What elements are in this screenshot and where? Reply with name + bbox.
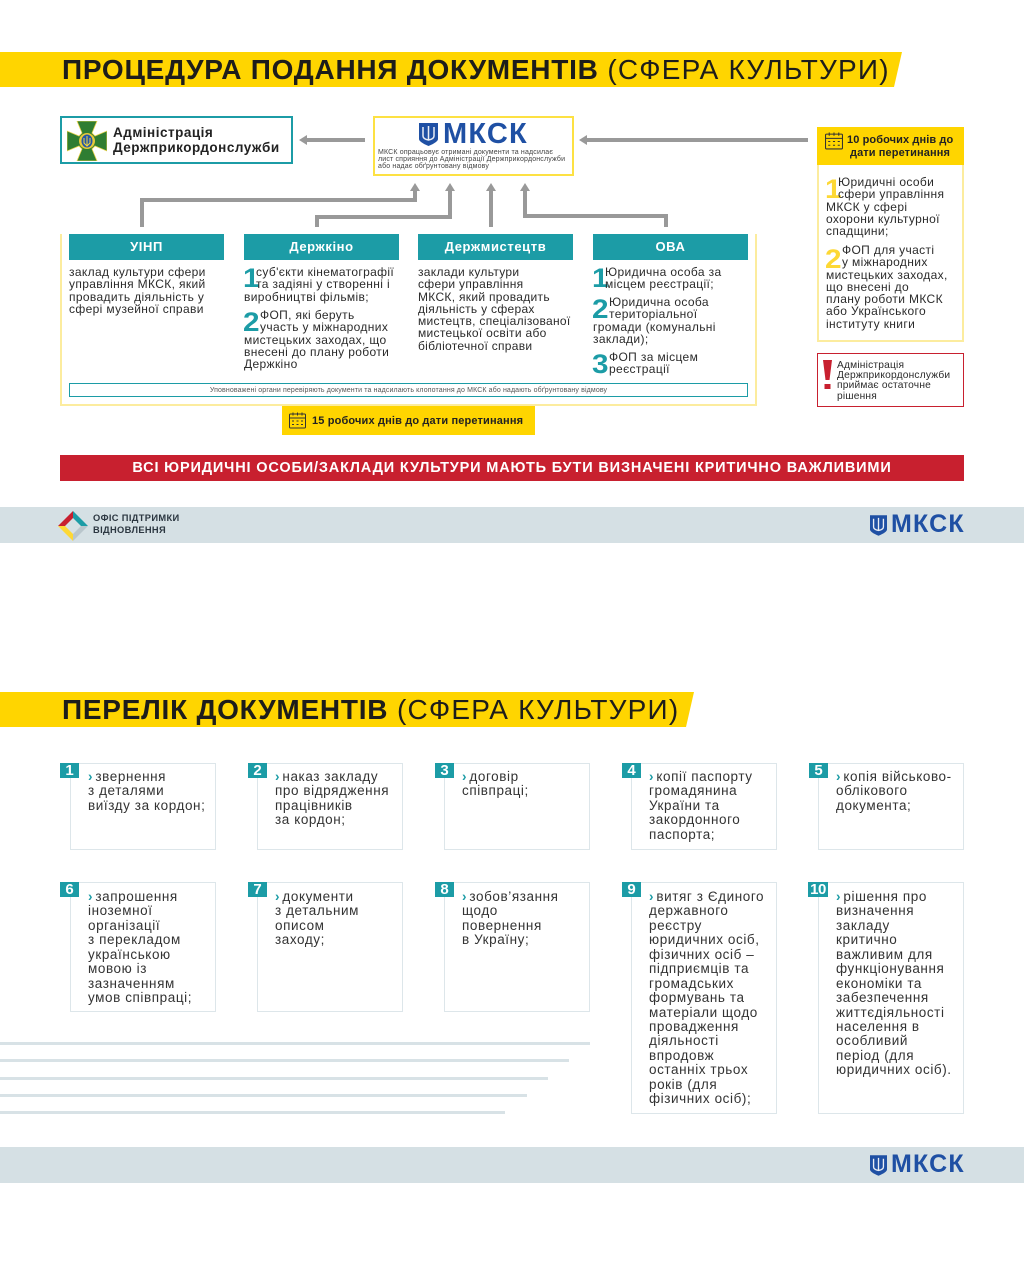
text: OVA item 2: заклади); [593, 332, 649, 346]
text: right item 2: інституту книги [826, 317, 915, 331]
footer bar 2 [0, 1147, 1024, 1183]
text: MKSK description: лист сприяння до Адміністрації Держприкордонслужби [378, 156, 565, 163]
frame: authorised bodies [60, 234, 757, 406]
title: list of documents: ПЕРЕЛІК ДОКУМЕНТІВ (СФЕРА КУЛЬТУРИ) [62, 694, 679, 725]
text: UINP: провадить діяльність у [69, 290, 204, 304]
card 1 [70, 763, 216, 850]
arrows: flow connectors [140, 135, 808, 227]
header: OVA [593, 234, 748, 260]
number: Derzhkino 2: 2 [243, 307, 260, 337]
tag 8 [435, 882, 454, 897]
text: Derzhkino item 2: внесені до плану роботи [244, 345, 389, 359]
text: Derzhkino item 2: мистецьких заходах, що [244, 333, 387, 347]
note: authorised bodies check documents: Уповноважені органи перевіряють документи та надсилають клопотання до МКСК або надають обґрунтовану відмову [210, 387, 607, 394]
text 2: про відрядження [275, 783, 389, 798]
text: right item 2 [826, 243, 948, 331]
text: OVA item 1: місцем реєстрації; [605, 277, 714, 291]
text 9: реєстру [649, 918, 702, 933]
text 2: › наказ закладу [275, 769, 378, 784]
text 6: з перекладом [88, 932, 181, 947]
card 5 [818, 763, 964, 850]
text 4: громадянина [649, 783, 737, 798]
tag 5 [809, 763, 828, 778]
icon: border guard cross [67, 121, 107, 161]
note: authorised bodies check documents [69, 383, 748, 397]
text 10: забезпечення [836, 990, 929, 1005]
text: Derzhmystetstv: заклади культури [418, 265, 519, 279]
text 7: › документи [275, 889, 354, 904]
text 4: закордонного [649, 812, 740, 827]
text 10: критично [836, 932, 897, 947]
number: right 2: 2 [825, 244, 842, 274]
text 2 [275, 769, 389, 827]
text 8: щодо [462, 903, 498, 918]
text 5: облікового [836, 783, 908, 798]
text 10: населення в [836, 1019, 920, 1034]
text: OVA item 3: реєстрації [609, 362, 670, 376]
text 3: › договір [462, 769, 519, 784]
text 5 [836, 769, 952, 813]
card 9 [631, 882, 777, 1114]
tag 1: 1 [65, 762, 74, 779]
footer bar 1 [0, 507, 1024, 543]
text 3 [462, 769, 529, 798]
text: final decision: рішення [837, 391, 877, 402]
text: MKSK description: МКСК опрацьовує отримані документи та надсилає [378, 149, 553, 156]
text 4: паспорта; [649, 827, 715, 842]
tag 10: 10 [810, 881, 826, 898]
text 10: функціонування [836, 961, 944, 976]
number: Derzhkino 1: 1 [243, 263, 260, 293]
text 6: › запрошення [88, 889, 178, 904]
text: right item 2: ФОП для участі [842, 243, 934, 257]
header: Derzhmystetstv: Держмистецтв [445, 239, 546, 254]
header: Derzhkino [244, 234, 399, 260]
number: right 1: 1 [825, 174, 842, 204]
text 9: › витяг з Єдиного [649, 889, 764, 904]
text 1: з деталями [88, 783, 164, 798]
text 1: › звернення [88, 769, 166, 784]
text 6: українською [88, 947, 171, 962]
tag 8: 8 [440, 881, 449, 898]
text: Derzhkino item 2: участь у міжнародних [260, 320, 388, 334]
tag 2: 2 [253, 762, 262, 779]
text: right item 2: або Українського [826, 304, 926, 318]
text: UINP: заклад культури сфери [69, 265, 206, 279]
text: Derzhmystetstv: діяльність у сферах [418, 302, 535, 316]
text 6: організації [88, 918, 160, 933]
text 4 [649, 769, 753, 842]
text 7: з детальним [275, 903, 359, 918]
text: Derzhkino item 1: виробництві фільмів; [244, 290, 369, 304]
text 6: умов співпраці; [88, 990, 192, 1005]
text: 10 days heading: дати перетинання [850, 147, 950, 159]
text: recovery office: ОФІС ПІДТРИМКИ [93, 513, 180, 523]
text 9: останніх трьох [649, 1062, 748, 1077]
text: OVA item 3 [609, 350, 698, 376]
icon: calendar small [825, 132, 843, 150]
tag 1 [60, 763, 79, 778]
tag 6 [60, 882, 79, 897]
panel: border guard administration [60, 116, 293, 164]
text: right item 1: охорони культурної [826, 212, 940, 226]
text: final decision: Держприкордонслужби [837, 370, 950, 381]
text: Derzhkino item 2: Держкіно [244, 357, 298, 371]
text: MKSK description: або надає обґрунтовану відмову [378, 163, 489, 170]
icon: trident shield [419, 123, 438, 146]
text: 15 days: 15 робочих днів до дати перетинання [312, 415, 523, 427]
text 7: описом [275, 918, 325, 933]
banner: list title [0, 692, 694, 727]
text 4: › копії паспорту [649, 769, 753, 784]
text: final decision: приймає остаточне [837, 380, 931, 391]
text 9: громадських [649, 976, 734, 991]
text: 10 days heading [847, 134, 953, 159]
text: right item 2: у міжнародних [842, 255, 928, 269]
banner: procedure title [0, 52, 902, 87]
text: UINP: управління МКСК, який [69, 277, 206, 291]
text: right item 1 [826, 175, 944, 238]
text 10: › рішення про [836, 889, 927, 904]
text: administration name: Держприкордонслужби [113, 140, 280, 154]
card 8 [444, 882, 590, 1012]
text 9: державного [649, 903, 729, 918]
logo text: MKSK: МКСК [891, 510, 965, 538]
text 6: іноземної [88, 903, 153, 918]
text 6: зазначенням [88, 976, 175, 991]
text: Derzhmystetstv: МКСК, який провадить [418, 290, 550, 304]
icon: trident shield [870, 1155, 887, 1176]
text 1 [88, 769, 205, 813]
card 3 [444, 763, 590, 850]
header: UINP [69, 234, 224, 260]
text: UINP: сфері музейної справи [69, 302, 204, 316]
text 10: життєдіяльності [836, 1004, 945, 1020]
text 7: заходу; [275, 932, 325, 947]
text 9: впродовж [649, 1048, 714, 1063]
text 10: економіки та [836, 976, 922, 991]
tag 6: 6 [65, 881, 74, 898]
text: OVA item 2: Юридична особа [609, 295, 709, 309]
text 2: за кордон; [275, 812, 346, 827]
badge: 15 working days [282, 406, 535, 435]
number: OVA 3: 3 [592, 349, 609, 379]
card 7 [257, 882, 403, 1012]
icon: exclamation mark [823, 360, 832, 389]
text 9: формувань та [649, 990, 745, 1005]
icon: calendar [289, 412, 306, 428]
text: right item 2: плану роботи МКСК [826, 292, 943, 306]
text 10: юридичних осіб). [836, 1062, 952, 1077]
text: right item 1: МКСК у сфері [826, 200, 907, 214]
text: Derzhmystetstv: сфери управління [418, 277, 523, 291]
tag 4: 4 [627, 762, 636, 779]
text: Derzhkino item 1: суб'єкти кінематографії [256, 265, 394, 279]
text: Derzhmystetstv: мистецтв, спеціалізованої [418, 314, 571, 328]
text: recovery office: ВІДНОВЛЕННЯ [93, 524, 166, 534]
text: administration name [113, 125, 280, 155]
text 10: період (для [836, 1048, 914, 1063]
text 8: › зобов’язання [462, 889, 559, 904]
card 6 [70, 882, 216, 1012]
text 1: виїзду за кордон; [88, 798, 205, 813]
text 7 [275, 889, 359, 947]
text 9: провадження [649, 1019, 739, 1034]
text: Derzhkino item 2: ФОП, які беруть [260, 308, 355, 322]
tag 4 [622, 763, 641, 778]
card 4 [631, 763, 777, 850]
text 2: працівників [275, 798, 353, 813]
text: Derzhmystetstv: бібліотечної справи [418, 339, 532, 353]
text: Derzhkino item 2 [244, 308, 389, 371]
text: right item 2: що внесені до [826, 280, 909, 294]
card 2 [257, 763, 403, 850]
tag 3 [435, 763, 454, 778]
panel: MKSK [373, 116, 574, 176]
text: OVA item 1 [605, 265, 722, 291]
callout: final decision [817, 353, 964, 407]
text 10: закладу [836, 918, 890, 933]
text 9: юридичних осіб, [649, 932, 760, 947]
header: OVA: ОВА [655, 239, 686, 254]
banner: critical importance: ВСІ ЮРИДИЧНІ ОСОБИ/ЗАКЛАДИ КУЛЬТУРИ МАЮТЬ БУТИ ВИЗНАЧЕНІ КРИТИЧНО ВАЖЛИВИМИ [132, 460, 892, 476]
text: Derzhkino item 1: та задіяні у створенні і [256, 277, 390, 291]
text: recovery office [93, 513, 180, 535]
tag 7 [248, 882, 267, 897]
icon: trident shield [870, 515, 887, 536]
logo text: MKSK: МКСК [891, 1150, 965, 1178]
header: Derzhkino: Держкіно [289, 239, 354, 254]
text: final decision [837, 360, 950, 402]
text: OVA item 3: ФОП за місцем [609, 350, 698, 364]
tag 5: 5 [814, 762, 823, 779]
text 3: співпраці; [462, 783, 529, 798]
text 9: фізичних осіб); [649, 1091, 751, 1106]
number: OVA 1: 1 [592, 263, 609, 293]
text 10 [836, 889, 952, 1077]
text 9: фізичних осіб – [649, 947, 754, 962]
text: UINP [69, 265, 206, 316]
text: OVA item 1: Юридична особа за [605, 265, 721, 279]
text 9: років (для [649, 1077, 717, 1092]
text: Derzhmystetstv: мистецької освіти або [418, 326, 547, 340]
text: OVA item 2 [593, 295, 716, 346]
text: OVA item 2: територіальної [609, 307, 697, 321]
text 5: › копія військово- [836, 769, 952, 784]
text: final decision: Адміністрація [837, 360, 904, 371]
text 9 [649, 889, 764, 1106]
text: right item 2: мистецьких заходах, [826, 268, 948, 282]
text 6: мовою із [88, 961, 147, 976]
text 5: документа; [836, 798, 911, 813]
text: Derzhkino item 1 [244, 265, 394, 304]
text: right item 1: Юридичні особи [838, 175, 934, 189]
logo text: MKSK: МКСК [443, 118, 528, 150]
text 9: матеріали щодо [649, 1004, 758, 1020]
text 4: України та [649, 798, 720, 813]
text 8 [462, 889, 559, 947]
card 10 [818, 882, 964, 1114]
text: right item 1: сфери управління [838, 187, 944, 201]
text 9: діяльності [649, 1033, 719, 1048]
text 6 [88, 889, 192, 1005]
tag 9: 9 [627, 881, 636, 898]
icon: recovery office logo [58, 511, 88, 541]
text: OVA item 2: громади (комунальні [593, 320, 716, 334]
text 8: в Україну; [462, 932, 529, 947]
header: UINP: УІНП [130, 239, 163, 254]
header: 10 days [817, 127, 964, 165]
text 10: важливим для [836, 947, 933, 962]
text 9: підприємців та [649, 961, 749, 976]
tag 7: 7 [253, 881, 262, 898]
text 10: особливий [836, 1033, 908, 1048]
tag 9 [622, 882, 641, 897]
number: OVA 2: 2 [592, 294, 609, 324]
panel: 10 working days [817, 127, 964, 342]
banner: critical importance [60, 455, 964, 481]
text 8: повернення [462, 918, 542, 933]
text: Derzhmystetstv [418, 265, 571, 353]
header: Derzhmystetstv [418, 234, 573, 260]
text: 10 days heading: 10 робочих днів до [847, 134, 953, 146]
text: right item 1: спадщини; [826, 224, 889, 238]
text: MKSK description [378, 148, 565, 170]
tag 3: 3 [440, 762, 449, 779]
tag 2 [248, 763, 267, 778]
text 10: визначення [836, 903, 914, 918]
title: procedure: ПРОЦЕДУРА ПОДАННЯ ДОКУМЕНТІВ (СФЕРА КУЛЬТУРИ) [62, 54, 890, 85]
text: administration name: Адміністрація [113, 125, 213, 140]
